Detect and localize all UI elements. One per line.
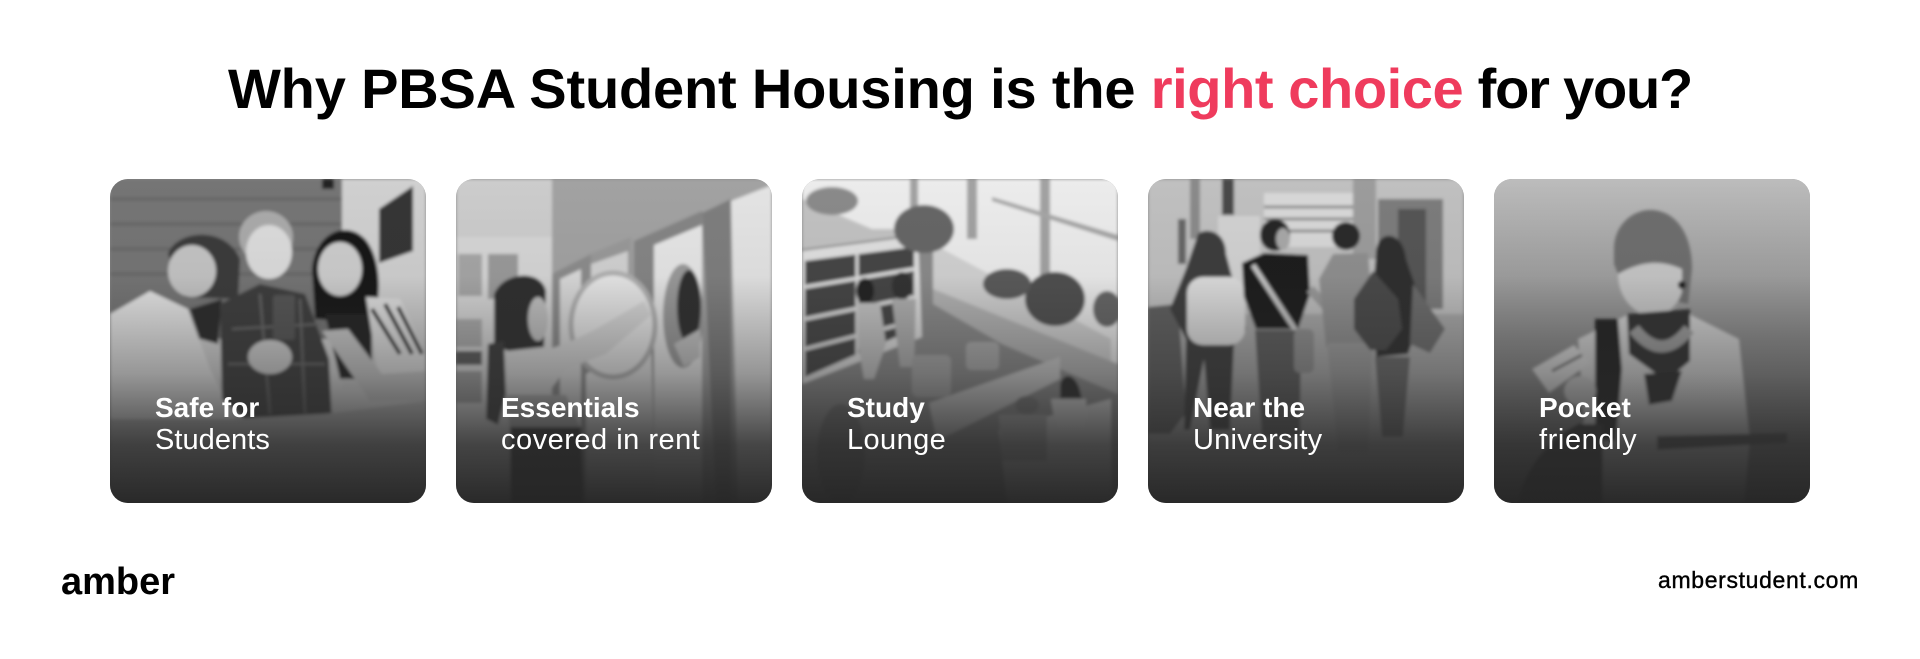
caption: Near the: [1193, 392, 1305, 423]
caption: friendly: [1539, 424, 1637, 456]
caption: [847, 392, 946, 456]
panel: pocket friendly: [1494, 179, 1810, 503]
caption: Study: [847, 392, 925, 423]
photo: woman at a washing machine: [456, 179, 772, 503]
website url: amberstudent.com: [1658, 567, 1859, 593]
logo: amber: amber: [61, 561, 175, 603]
panel: near the university: [1148, 179, 1464, 503]
caption: [501, 392, 700, 456]
panel: safe for students: [110, 179, 426, 503]
caption: Safe for: [155, 392, 259, 423]
photo: woman holding banknotes: [1494, 179, 1810, 503]
caption: Pocket: [1539, 392, 1631, 423]
caption: University: [1193, 424, 1322, 456]
panel: study lounge: [802, 179, 1118, 503]
caption: Students: [155, 424, 270, 456]
photo: three students on a sofa: [110, 179, 426, 503]
caption: [1539, 392, 1637, 456]
caption: Lounge: [847, 424, 946, 456]
caption: Essentials: [501, 392, 640, 423]
photo: four students walking down a corridor: [1148, 179, 1464, 503]
panel: essentials covered in rent: [456, 179, 772, 503]
caption: [1193, 392, 1322, 456]
caption: [155, 392, 270, 456]
title: Why PBSA Student Housing is the right choice for you?: [228, 57, 1692, 120]
photo: study lounge seen from above: [802, 179, 1118, 503]
caption: covered in rent: [501, 424, 700, 456]
